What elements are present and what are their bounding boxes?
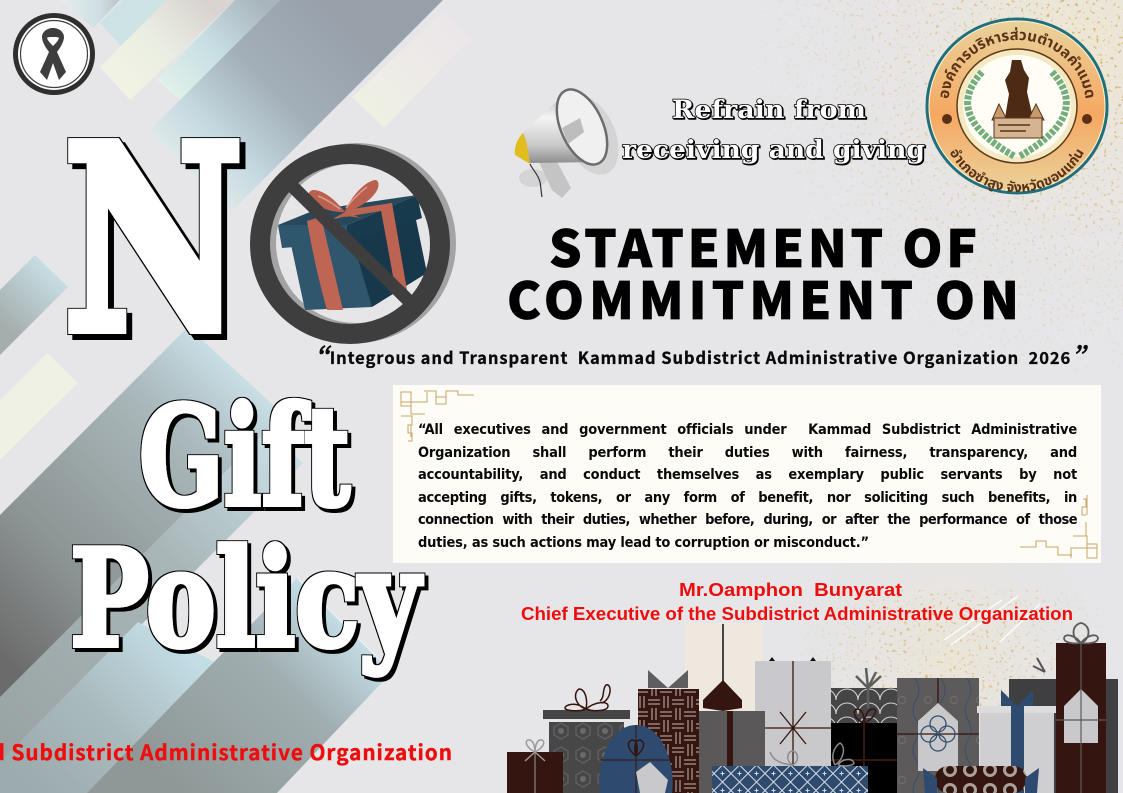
icon: no-gift prohibition sign (260, 153, 446, 334)
tall brown box with tag (1056, 623, 1106, 793)
policy statement text: “All executives and government officials under Kammad Subdistrict Administrative (418, 422, 1077, 438)
policy statement text: connection with their duties, whether before, during, or after the performance of those (418, 512, 1077, 528)
black box (831, 709, 907, 793)
heading: statement of commitment on: COMMITMENT ON (507, 260, 1019, 334)
brown woven box (638, 670, 699, 793)
heading: refrain from receiving and giving: receiving and giving (622, 135, 925, 164)
icon: black ribbon badge (13, 13, 95, 95)
corner ornament top-left (401, 391, 474, 441)
signatory name and title: Mr.Oamphon Bunyarat (679, 580, 902, 600)
icon: subdistrict seal: องค์การบริหารส่วนตำบลคำแมด (940, 27, 1094, 98)
navy round box with tag (599, 725, 673, 793)
signatory name and title: Chief Executive of the Subdistrict Administrative Organization (521, 604, 1073, 624)
subtitle: integrous and transparent: “Integrous and Transparent Kammad Subdistrict Administrative Organization 2026” (315, 336, 1088, 371)
illustration: row of gift boxes (507, 623, 1118, 793)
panel: policy statement background (393, 385, 1101, 563)
title word: Gift: Gift (139, 376, 350, 538)
policy statement text: accountability, and conduct themselves as exemplary public servants by not (418, 467, 1077, 483)
scalloped dark box (831, 668, 897, 723)
policy statement text: duties, as such actions may lead to corruption or misconduct.” (418, 535, 869, 551)
gold speckles (730, 0, 1123, 750)
signatory name and title (521, 580, 1073, 624)
candy (923, 766, 1039, 793)
icon: subdistrict seal: อำเภอซำสูง จังหวัดขอนแก่น (950, 149, 1084, 192)
policy statement text (418, 422, 1077, 551)
title word: No (letter N): N (64, 91, 244, 390)
white box with navy ribbon (977, 690, 1058, 793)
heading: statement of commitment on (507, 208, 1019, 334)
policy statement text: accepting gifts, tokens, or any form of benefit, nor soliciting such benefits, in (418, 490, 1077, 506)
title word: Policy: Policy (70, 520, 423, 678)
heading: statement of commitment on: STATEMENT OF (549, 208, 977, 282)
gray patterned box with lid (543, 685, 630, 793)
heading: refrain from receiving and giving: Refrain from (672, 95, 866, 124)
policy statement text: Organization shall perform their duties with fairness, transparency, and (418, 445, 1077, 461)
gift box (278, 180, 427, 310)
light gray box with star (755, 657, 831, 766)
icon: subdistrict seal (926, 18, 1108, 194)
small brown box (507, 740, 563, 793)
gray wavy box with tag (897, 678, 979, 793)
corner ornament bottom-right (1020, 495, 1097, 558)
icon: megaphone (515, 82, 630, 198)
navy diamond box (712, 743, 868, 793)
gray box with brown bow (699, 680, 765, 793)
heading: refrain from receiving and giving (622, 95, 925, 164)
